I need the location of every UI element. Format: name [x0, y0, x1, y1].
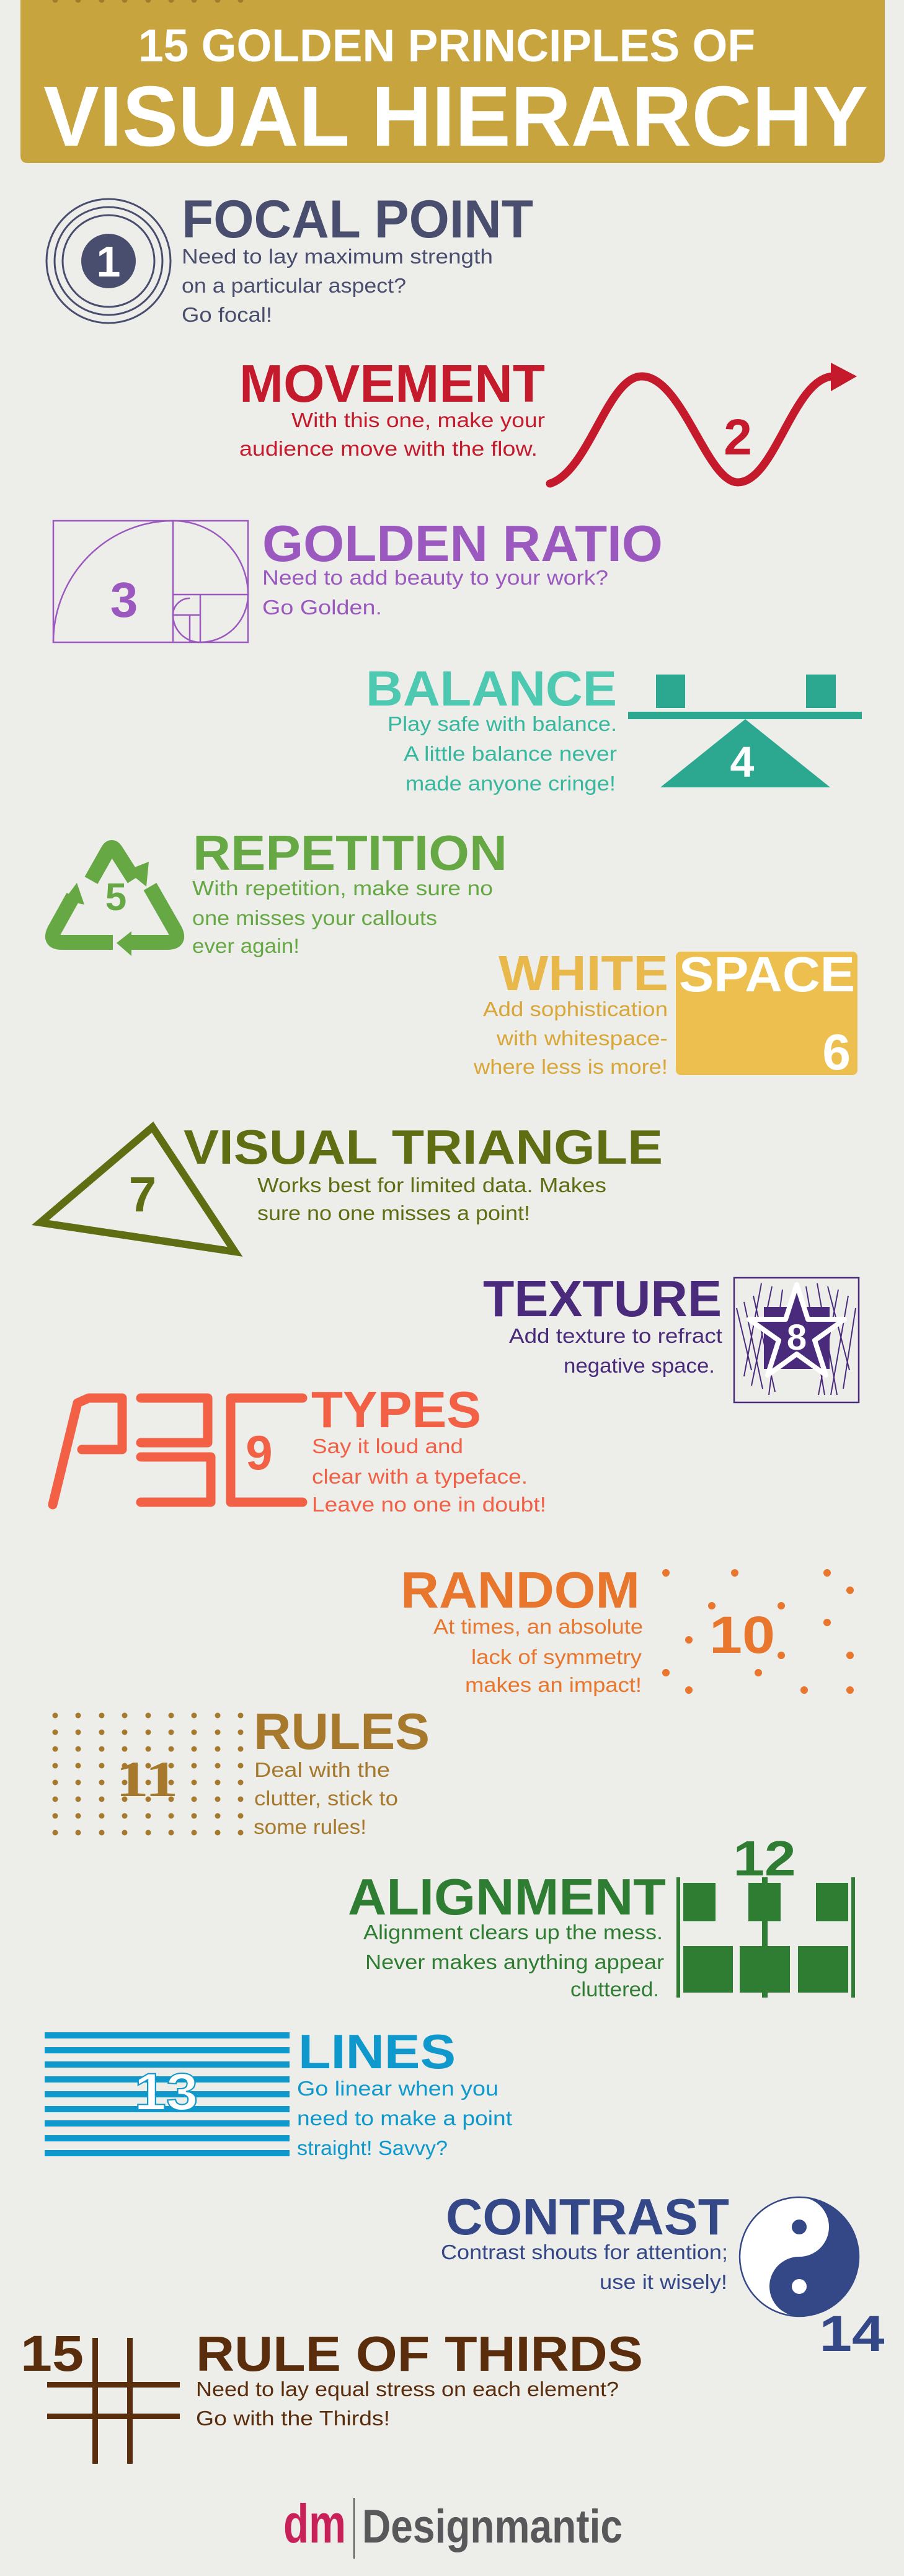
icon: horizontal stripes [45, 2032, 290, 2156]
footer logo [283, 2493, 623, 2559]
principle 10: random: makes an impact! [465, 1673, 642, 1696]
icon: yellow box: SPACE [679, 947, 855, 1002]
icon: thirds grid [20, 2326, 180, 2464]
principle 2: movement: With this one, make your [291, 409, 545, 432]
principle 3: golden ratio [53, 515, 663, 642]
principle 15: rule of thirds [20, 2326, 643, 2464]
principle 12: alignment: cluttered. [570, 1978, 659, 2001]
icon: concentric circles: 1 [97, 237, 120, 286]
icon: aligned blocks: 12 [733, 1831, 796, 1886]
icon: recycle arrows [53, 848, 177, 956]
principle 13: lines: need to make a point [297, 2107, 512, 2130]
footer logo: dm [283, 2493, 346, 2554]
principle 11: rules: some rules! [254, 1815, 366, 1838]
icon: triangle [40, 1127, 235, 1252]
principle 9: types: 9 [246, 1425, 273, 1480]
principle 9: types [53, 1381, 546, 1516]
title banner [20, 0, 885, 164]
principle 1: focal point: Need to lay maximum strength [182, 245, 493, 268]
title banner: 15 GOLDEN PRINCIPLES OF [138, 20, 755, 71]
icon: recycle arrows: 5 [105, 876, 126, 919]
icon: seesaw [628, 675, 862, 787]
principle 9: types: TYPES [311, 1381, 481, 1438]
icon: random dots [662, 1569, 854, 1694]
principle 11: rules: Deal with the [254, 1758, 390, 1781]
icon: seesaw: 4 [730, 738, 755, 786]
principle 13: lines: Go linear when you [297, 2077, 499, 2100]
principle 12: alignment: Never makes anything appear [365, 1950, 664, 1973]
principle 14: contrast: Contrast shouts for attention; [441, 2241, 728, 2264]
icon: wave arrow [550, 363, 857, 484]
principle 12: alignment: Alignment clears up the mess. [363, 1921, 663, 1944]
icon: yin yang: 14 [820, 2306, 885, 2362]
principle 8: texture: negative space. [564, 1354, 715, 1377]
principle 3: golden ratio: Need to add beauty to your work? [262, 566, 608, 589]
principle 6: white space: Add sophistication [483, 998, 668, 1020]
principle 9: types: Say it loud and [312, 1435, 463, 1458]
principle 10: random: At times, an absolute [433, 1615, 643, 1638]
icon: wave arrow: 2 [724, 409, 752, 466]
principle 6: white space: where less is more! [473, 1055, 668, 1078]
principle 14: contrast: use it wisely! [600, 2270, 727, 2293]
principle 3: golden ratio: Go Golden. [262, 596, 382, 619]
icon: random dots: 10 [709, 1606, 775, 1664]
principle 2: movement: audience move with the flow. [239, 437, 538, 460]
icon: golden spiral: 3 [110, 572, 138, 627]
icon: golden spiral [53, 521, 248, 642]
principle 7: visual triangle [40, 1120, 663, 1252]
principle 12: alignment: ALIGNMENT [348, 1868, 666, 1926]
principle 1: focal point: FOCAL POINT [182, 190, 533, 249]
icon: yin yang [740, 2197, 885, 2362]
principle 13: lines [45, 2024, 512, 2159]
icon: dot grid: 11 [115, 1751, 179, 1807]
icon: aligned blocks [676, 1831, 855, 1998]
title banner: VISUAL HIERARCHY [43, 69, 868, 164]
principle 1: focal point: on a particular aspect? [182, 274, 406, 297]
principle 9: types: Leave no one in doubt! [312, 1493, 546, 1516]
principle 8: texture: Add texture to refract [509, 1324, 722, 1347]
principle 10: random: RANDOM [401, 1561, 640, 1619]
principle 7: visual triangle: VISUAL TRIANGLE [184, 1120, 663, 1174]
principle 14: contrast [441, 2188, 885, 2362]
icon: yellow box [676, 947, 857, 1081]
principle 11: rules: RULES [254, 1702, 430, 1760]
principle 11: rules [52, 0, 430, 1838]
principle 14: contrast: CONTRAST [446, 2188, 729, 2246]
icon: concentric circles [47, 199, 171, 323]
principle 6: white space: with whitespace- [496, 1027, 668, 1050]
principle 5: repetition [53, 825, 507, 957]
principle 9: types: clear with a typeface. [312, 1465, 528, 1488]
principle 10: random: lack of symmetry [471, 1645, 642, 1668]
principle 4: balance: made anyone cringe! [405, 772, 616, 795]
principle 15: rule of thirds: Need to lay equal stress on each element? [196, 2378, 619, 2401]
principle 7: visual triangle: sure no one misses a point! [257, 1202, 530, 1224]
principle 5: repetition: one misses your callouts [192, 906, 437, 929]
principle 5: repetition: With repetition, make sure no [192, 877, 493, 900]
principle 12: alignment [348, 1831, 855, 2001]
principle 10: random [401, 1561, 854, 1696]
principle 4: balance: BALANCE [366, 661, 617, 716]
icon: dot grid [52, 0, 243, 1835]
principle 2: movement: MOVEMENT [239, 355, 545, 414]
principle 4: balance [366, 661, 862, 795]
principle 8: texture: TEXTURE [483, 1270, 722, 1327]
principle 6: white space [473, 945, 857, 1081]
principle 6: white space: WHITE [499, 945, 668, 1001]
principle 1: focal point: Go focal! [182, 303, 272, 326]
footer logo: Designmantic [362, 2500, 623, 2553]
icon: thirds grid: 15 [20, 2326, 84, 2382]
principle 1: focal point [47, 190, 533, 326]
principle 3: golden ratio: GOLDEN RATIO [262, 515, 663, 572]
icon: ABC letter shapes [53, 1398, 303, 1505]
principle 5: repetition: ever again! [192, 934, 299, 957]
principle 4: balance: A little balance never [404, 742, 617, 765]
principle 15: rule of thirds: RULE OF THIRDS [196, 2326, 643, 2381]
icon: textured star box: 8 [787, 1317, 807, 1358]
principle 8: texture [483, 1270, 859, 1402]
principle 15: rule of thirds: Go with the Thirds! [196, 2407, 390, 2430]
icon: triangle: 7 [129, 1167, 156, 1222]
principle 7: visual triangle: Works best for limited data. Makes [257, 1174, 606, 1197]
icon: yellow box: 6 [822, 1024, 851, 1081]
principle 11: rules: clutter, stick to [254, 1787, 398, 1810]
principle 2: movement [239, 355, 857, 484]
principle 5: repetition: REPETITION [193, 825, 507, 880]
icon: textured star box [734, 1278, 859, 1402]
principle 13: lines: LINES [298, 2024, 456, 2079]
principle 13: lines: straight! Savvy? [297, 2136, 448, 2159]
principle 4: balance: Play safe with balance. [388, 712, 617, 735]
icon: horizontal stripes: 13 [134, 2063, 198, 2121]
